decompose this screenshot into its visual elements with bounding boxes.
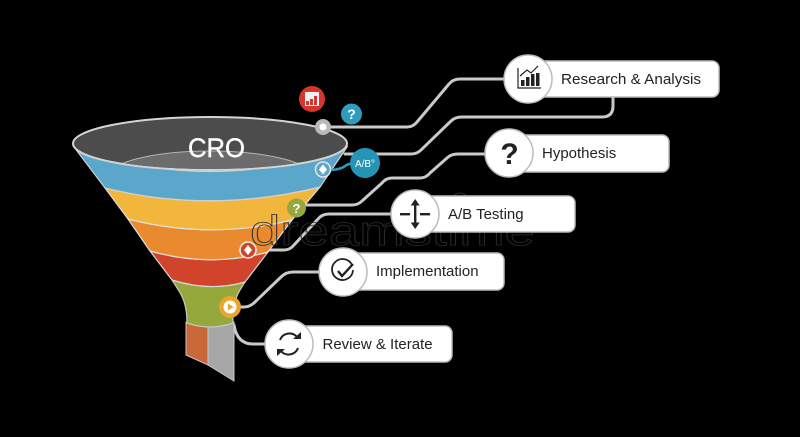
step: A/B Testing	[391, 190, 575, 238]
icon: A/B badge	[350, 148, 380, 178]
step: Research & Analysis: Research & Analysis	[561, 71, 701, 88]
node: grey marker	[315, 119, 331, 135]
title: CRO: CRO	[188, 133, 245, 163]
step: Review & Iterate	[265, 320, 452, 368]
node: red marker	[240, 242, 256, 258]
band: red	[150, 251, 268, 287]
watermark: dreamstime	[250, 207, 535, 254]
icon: split arrows	[400, 199, 430, 229]
spout: orange panel	[186, 322, 208, 365]
icon: refresh arrows	[277, 332, 301, 356]
node: play marker	[219, 296, 241, 318]
node: green question marker	[287, 198, 306, 218]
node: green question marker: ?	[293, 201, 301, 216]
step: Review & Iterate: Review & Iterate	[322, 336, 433, 353]
icon: bar chart	[518, 66, 541, 88]
step: Hypothesis: Hypothesis	[542, 145, 616, 162]
icon: red chart badge	[299, 86, 325, 112]
spout: grey panel	[208, 322, 234, 381]
icon: check circle	[332, 259, 353, 280]
icon: blue question badge: ?	[347, 106, 356, 122]
funnel rim	[73, 117, 347, 170]
connector: teal A/B link	[328, 164, 354, 170]
icon: A/B badge: A/B°	[355, 159, 375, 170]
band: blue	[74, 147, 347, 201]
watermark	[250, 193, 535, 254]
step: Research & Analysis	[504, 55, 719, 103]
icon: question mark: ?	[500, 138, 519, 171]
funnel inner surface	[122, 150, 298, 169]
band: green	[172, 280, 245, 327]
band: orange	[128, 219, 292, 260]
step: Hypothesis	[485, 129, 669, 177]
step: A/B Testing: A/B Testing	[448, 206, 524, 223]
step: Implementation: Implementation	[376, 263, 479, 280]
step: Implementation	[319, 248, 504, 296]
connector lines	[232, 79, 613, 344]
node: blue marker	[316, 162, 330, 177]
icon: blue question badge	[341, 104, 362, 124]
band: yellow	[105, 187, 320, 230]
funnel	[73, 117, 347, 381]
